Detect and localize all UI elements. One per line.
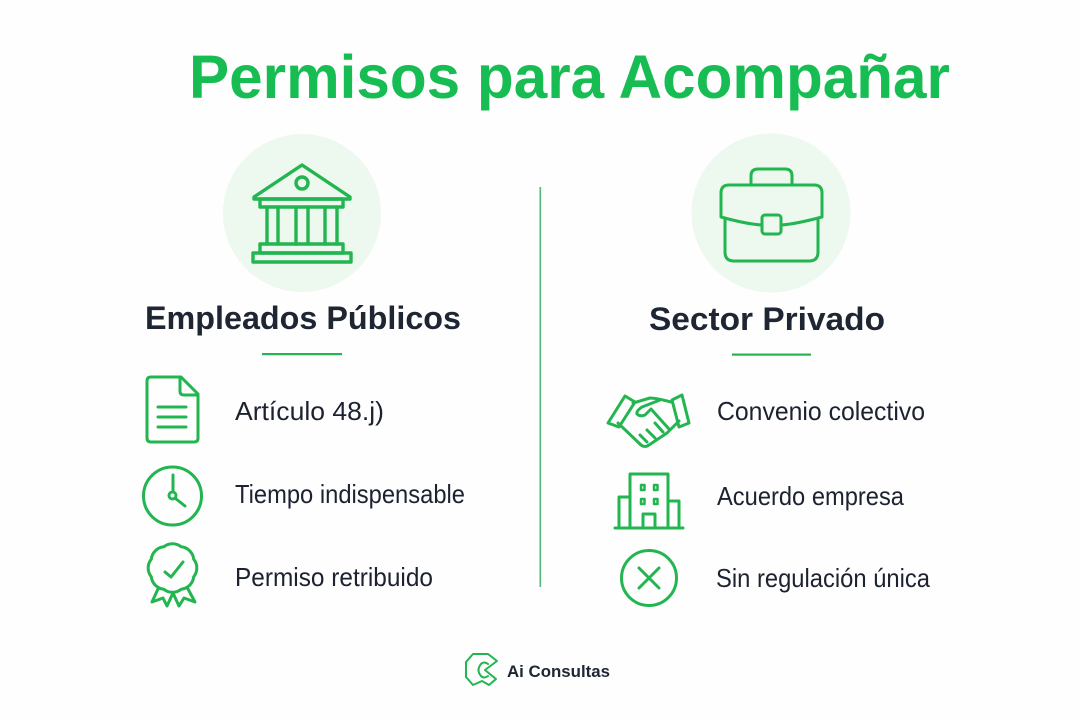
icon: document xyxy=(147,377,198,442)
text: permiso: Permiso retribuido xyxy=(235,562,433,592)
icon: clock xyxy=(144,467,202,525)
icon: briefcase xyxy=(692,134,850,292)
icon: logo mark xyxy=(466,654,497,685)
icon: handshake xyxy=(608,395,689,446)
item: tiempo xyxy=(144,467,465,525)
item: permiso xyxy=(148,544,433,606)
heading: empleados publicos: Empleados Públicos xyxy=(145,300,461,336)
logo: Ai Consultas xyxy=(466,654,610,685)
item: acuerdo xyxy=(615,474,904,528)
icon: cross circle xyxy=(622,550,676,606)
icon: office building xyxy=(615,474,683,528)
title: Permisos para Acompañar xyxy=(189,43,950,111)
text: sin regulacion: Sin regulación única xyxy=(716,563,930,593)
panel: empleados publicos xyxy=(144,134,465,606)
icon: government building xyxy=(223,134,381,292)
item: sin regulacion xyxy=(622,550,930,606)
heading: sector privado: Sector Privado xyxy=(649,301,885,337)
icon: award badge xyxy=(148,544,197,606)
item: convenio xyxy=(608,395,925,446)
text: tiempo: Tiempo indispensable xyxy=(235,479,465,509)
text: convenio: Convenio colectivo xyxy=(717,396,925,426)
text: articulo: Artículo 48.j) xyxy=(235,396,384,426)
panel: sector privado xyxy=(608,134,930,606)
item: articulo xyxy=(147,377,384,442)
text: acuerdo: Acuerdo empresa xyxy=(717,481,904,511)
text: brand name: Ai Consultas xyxy=(507,663,610,681)
